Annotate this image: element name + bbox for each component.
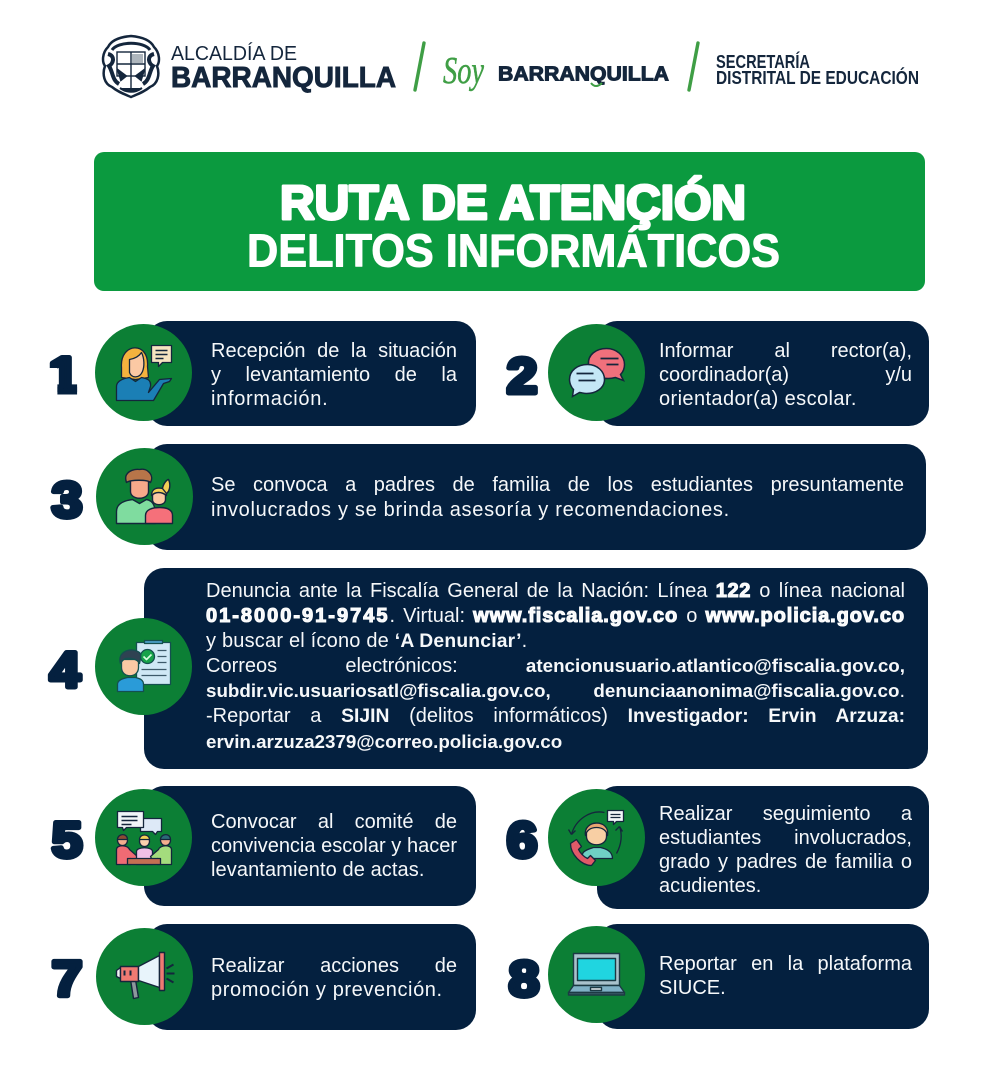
text 7: Realizar acciones de xyxy=(211,955,457,977)
text 7: promoción y prevención. xyxy=(211,979,443,1001)
divider slash 2 xyxy=(689,43,698,90)
logo: Soy Barranquilla: BARRANQUILLA xyxy=(498,64,669,86)
icon: committee meeting xyxy=(95,789,192,886)
text 1 xyxy=(211,340,457,410)
text 5: convivencia escolar y hacer xyxy=(211,835,457,857)
logo text: Secretaría Distrital de Educación: SECRETARÍA xyxy=(716,51,810,72)
step 4 xyxy=(48,568,928,769)
icon: woman speaking xyxy=(95,324,192,421)
panel 7 xyxy=(147,924,476,1030)
text 4: 01-8000-91-9745. Virtual: www.fiscalia.gov.co o www.policia.gov.co xyxy=(206,605,905,627)
text 3: Se convoca a padres de familia de los estudiantes presuntamente xyxy=(211,474,904,496)
logo text: Alcaldía de Barranquilla xyxy=(171,42,396,94)
divider slash 1 xyxy=(415,43,424,90)
number 8: 8 xyxy=(509,951,539,1007)
title line 1: RUTA DE ATENÇIÓN xyxy=(280,175,746,230)
text 1: Recepción de la situación xyxy=(211,340,457,362)
text 4: Denuncia ante la Fiscalía General de la Nación: Línea 122 o línea nacional xyxy=(206,580,905,602)
logo: Alcaldía crest xyxy=(103,36,159,97)
number 4: 4 xyxy=(50,642,80,698)
logo text: Secretaría Distrital de Educación: DISTRITAL DE EDUCACIÓN xyxy=(716,67,919,88)
text 8: SIUCE. xyxy=(659,977,726,999)
text 7 xyxy=(211,955,457,1001)
logo text: Alcaldía de Barranquilla: ALCALDÍA DE xyxy=(171,42,297,65)
text 6: estudiantes involucrados, xyxy=(659,827,912,849)
text 8 xyxy=(659,953,912,999)
step 8 xyxy=(508,924,929,1029)
step 1 xyxy=(50,321,476,426)
text 4: -Reportar a SIJIN (delitos informáticos) Investigador: Ervin Arzuza: xyxy=(206,705,905,727)
text 2: coordinador(a) y/u xyxy=(659,364,912,386)
panel 8 xyxy=(597,924,929,1029)
icon: laptop xyxy=(548,926,645,1023)
text 4: y buscar el ícono de ‘A Denunciar’. xyxy=(206,630,527,652)
icon: parent and child xyxy=(96,448,193,545)
text 2 xyxy=(659,340,912,410)
header logos xyxy=(102,34,919,98)
step 7 xyxy=(51,924,476,1030)
panel 2 xyxy=(597,321,929,426)
panel 3 xyxy=(147,444,926,550)
step 6 xyxy=(506,786,929,909)
text 4: Correos electrónicos: atencionusuario.atlantico@fiscalia.gov.co, xyxy=(206,655,905,677)
text 5 xyxy=(211,811,457,881)
text 4: ervin.arzuza2379@correo.policia.gov.co xyxy=(206,731,562,752)
panel 6 xyxy=(597,786,929,909)
text 2: Informar al rector(a), xyxy=(659,340,912,362)
text 3: involucrados y se brinda asesoría y recomendaciones. xyxy=(211,499,730,521)
title line 2: DELITOS INFORMÁTICOS xyxy=(247,224,780,276)
number 6: 6 xyxy=(507,812,537,868)
number 1: 1 xyxy=(49,347,79,403)
step 3 xyxy=(50,444,926,550)
step 5 xyxy=(50,786,476,906)
text 3 xyxy=(211,474,904,521)
step 2 xyxy=(506,321,929,426)
text 1: información. xyxy=(211,388,328,410)
icon: person with report xyxy=(95,618,192,715)
logo text: Alcaldía de Barranquilla: BARRANQUILLA xyxy=(171,62,396,94)
text 4: subdir.vic.usuariosatl@fiscalia.gov.co, denunciaanonima@fiscalia.gov.co. xyxy=(206,680,905,702)
text 6: Realizar seguimiento a xyxy=(659,803,912,825)
text 8: Reportar en la plataforma xyxy=(659,953,912,975)
title banner xyxy=(94,152,925,291)
panel 5 xyxy=(144,786,476,906)
number 2: 2 xyxy=(507,348,537,404)
text 6: grado y padres de familia o xyxy=(659,851,912,873)
icon: megaphone xyxy=(96,928,193,1025)
logo: Soy Barranquilla: Soy xyxy=(443,50,484,92)
icon: chat bubbles xyxy=(548,324,645,421)
number 7: 7 xyxy=(52,951,82,1007)
text 5: levantamiento de actas. xyxy=(211,859,425,881)
logo: Soy Barranquilla xyxy=(443,50,669,92)
text 2: orientador(a) escolar. xyxy=(659,388,857,410)
number 3: 3 xyxy=(52,472,82,528)
icon: call agent xyxy=(548,789,645,886)
panel 1 xyxy=(147,321,476,426)
panel 4 xyxy=(144,568,928,769)
text 5: Convocar al comité de xyxy=(211,811,457,833)
text 1: y levantamiento de la xyxy=(211,364,457,386)
text 4 xyxy=(206,580,905,752)
logo text: Secretaría Distrital de Educación xyxy=(716,51,919,88)
text 6 xyxy=(659,803,912,897)
number 5: 5 xyxy=(52,812,82,868)
text 6: acudientes. xyxy=(659,875,761,897)
